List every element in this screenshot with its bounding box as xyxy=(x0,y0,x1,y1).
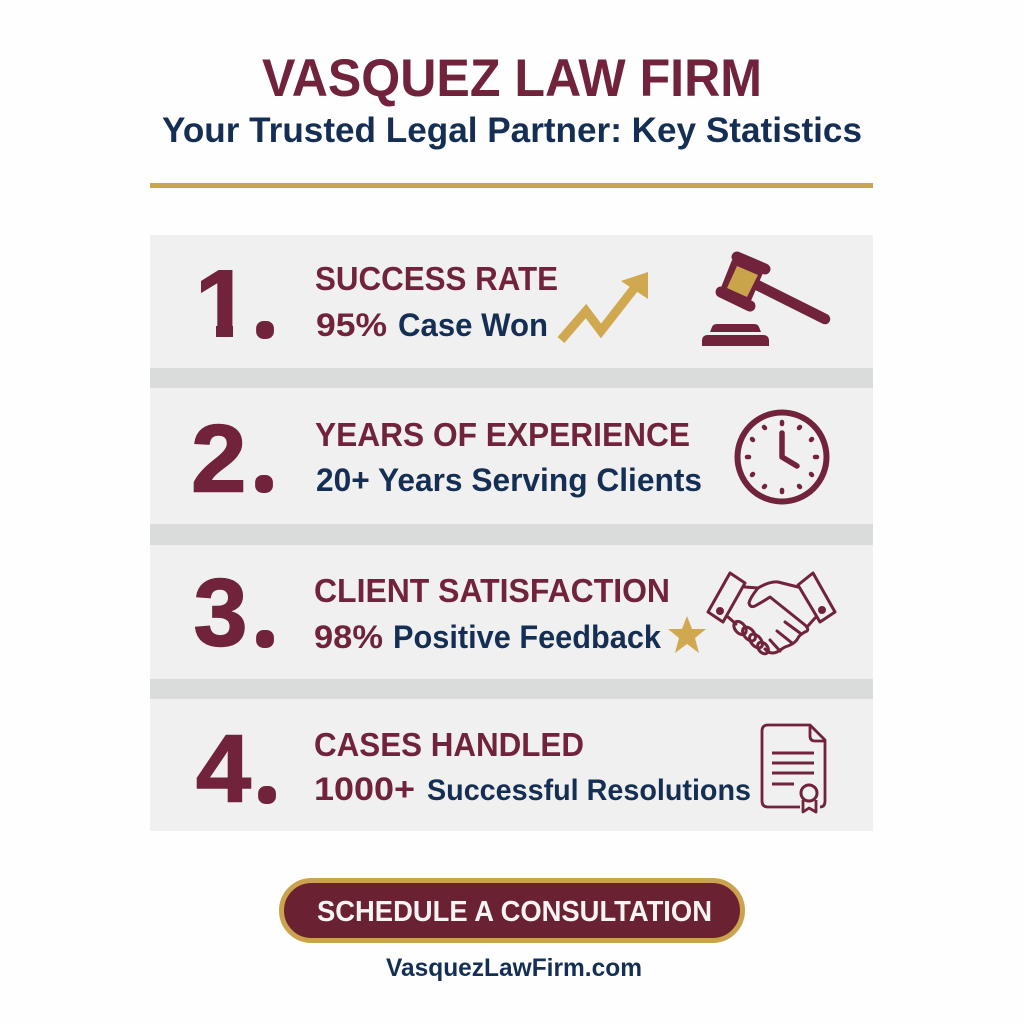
icon: certificate document xyxy=(762,725,825,812)
number 2: 2 xyxy=(191,406,246,512)
stat: 95% case won: 95% xyxy=(316,307,387,343)
header xyxy=(162,49,862,150)
stat: 20+ years: 20+ Years Serving Clients xyxy=(316,462,702,498)
icon: gavel xyxy=(702,257,825,346)
heading: cases handled: CASES HANDLED xyxy=(314,726,584,763)
infographic xyxy=(150,59,873,981)
panel: client satisfaction xyxy=(150,545,873,679)
subtitle: Your Trusted Legal Partner: Key Statistics xyxy=(162,111,862,150)
number 1: . xyxy=(262,314,268,336)
stat: 1000+ resolutions: Successful Resolutions xyxy=(427,774,751,807)
call to action button xyxy=(282,880,742,940)
panel: cases handled xyxy=(150,699,873,831)
stat: 98% positive feedback: 98% xyxy=(314,619,383,655)
icon: rising arrow xyxy=(561,272,648,340)
panel: success rate xyxy=(150,235,873,368)
number 1: 1 xyxy=(195,250,250,358)
number 3: . xyxy=(262,623,268,645)
icon: star xyxy=(668,616,706,653)
number 4: 4 xyxy=(196,716,251,822)
title: VASQUEZ LAW FIRM xyxy=(262,49,762,108)
number 2: . xyxy=(261,468,267,490)
heading: client satisfaction: CLIENT SATISFACTION xyxy=(314,572,670,609)
stat: 1000+ resolutions: 1000+ xyxy=(314,771,415,807)
heading: years of experience: YEARS OF EXPERIENCE xyxy=(315,416,690,453)
stat: 98% positive feedback: Positive Feedback xyxy=(393,619,661,655)
heading: success rate: SUCCESS RATE xyxy=(315,260,558,297)
number 3: 3 xyxy=(194,560,248,666)
panel: years of experience xyxy=(150,388,873,524)
website: VasquezLawFirm.com xyxy=(386,954,642,982)
number 4: . xyxy=(264,779,270,801)
icon: clock xyxy=(738,412,826,502)
button label: SCHEDULE A CONSULTATION xyxy=(317,896,712,928)
stat: 95% case won: Case Won xyxy=(398,307,548,343)
number 1 xyxy=(201,270,274,339)
icon: handshake xyxy=(708,573,835,656)
